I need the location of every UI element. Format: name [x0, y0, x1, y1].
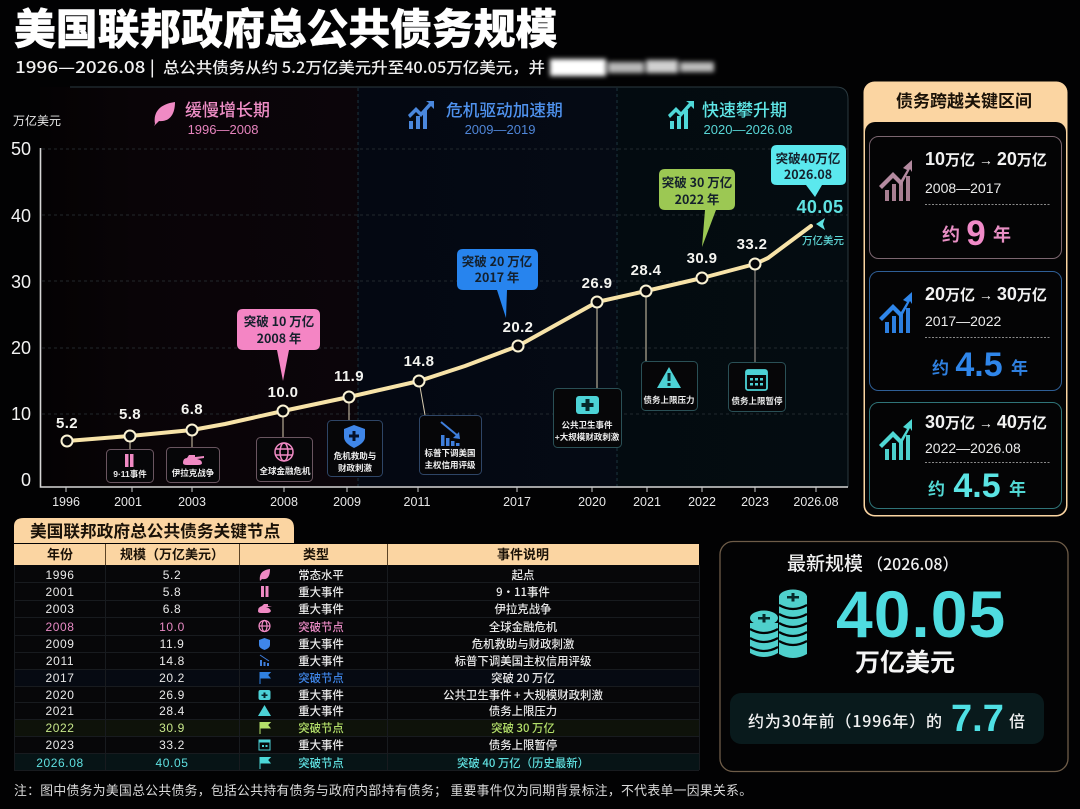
column: size: 6.8 — [163, 602, 181, 616]
card: 30 to 40: 年 — [1009, 475, 1026, 500]
card: 20 to 30 — [870, 272, 1062, 390]
latest value label: 40.05 — [796, 197, 844, 217]
table header: 年份 — [47, 544, 73, 563]
event box: debt ceiling suspension: 债务上限暂停 — [731, 396, 783, 406]
card: 10 to 20: 2008—2017 — [925, 180, 1002, 196]
event box: 9/11: 9·11事件 — [113, 469, 147, 479]
column: description: 公共卫生事件 + 大规模财政刺激 — [443, 687, 603, 703]
multiple bar — [730, 693, 1044, 744]
column: year — [36, 568, 84, 770]
multiple bar: 7.7 — [951, 698, 1004, 740]
latest value label: 万亿美元 — [802, 233, 844, 248]
column: type: 重大事件 — [298, 653, 344, 669]
data value labels: 5.8 — [119, 406, 141, 423]
column: description: 突破 40 万亿（历史最新） — [457, 755, 589, 771]
column: year: 2026.08 — [36, 756, 84, 770]
card: 20 to 30: 约 — [932, 354, 949, 379]
subtitle: 1996—2026.08 | — [15, 54, 155, 78]
callout: 30 trillion — [659, 169, 735, 247]
column: size: 5.8 — [163, 585, 181, 599]
card: 20 to 30: 20万亿 → 30万亿 — [925, 284, 1047, 305]
column: year: 2001 — [45, 585, 75, 599]
data value labels: 14.8 — [404, 353, 434, 370]
card: 20 to 30: 2017—2022 — [925, 313, 1002, 329]
subtitle — [15, 54, 714, 78]
card: 10 to 20 — [870, 136, 1062, 258]
column: size — [155, 568, 189, 770]
table header — [14, 544, 699, 565]
data value labels: 5.2 — [56, 415, 78, 432]
column: description: 9·11事件 — [496, 584, 550, 600]
column: year: 2023 — [45, 738, 75, 752]
event box: Iraq war: 伊拉克战争 — [172, 468, 215, 478]
column: description: 突破 30 万亿 — [491, 720, 555, 736]
y axis labels — [11, 112, 61, 490]
column: size: 10.0 — [159, 620, 185, 634]
column: type: 重大事件 — [298, 737, 344, 753]
card: 30 to 40 — [870, 402, 1062, 508]
period: crisis driven: 危机驱动加速期 — [446, 97, 563, 121]
event box: public health — [554, 388, 622, 448]
data value labels: 6.8 — [181, 401, 203, 418]
column: type — [298, 567, 344, 771]
card: 30 to 40: 2022—2026.08 — [925, 440, 1021, 456]
latest value label — [796, 197, 844, 248]
column: description: 伊拉克战争 — [495, 601, 551, 617]
event box: 9/11 — [106, 450, 154, 482]
row backgrounds — [14, 565, 700, 770]
column: type: 重大事件 — [298, 703, 344, 719]
column: year: 2003 — [45, 602, 75, 616]
column: type: 重大事件 — [298, 636, 344, 652]
x axis labels: 2001 — [114, 495, 142, 509]
period: rapid rise: 2020—2026.08 — [704, 122, 792, 137]
data value labels: 10.0 — [268, 384, 298, 401]
event box: public health: +大规模财政刺激 — [555, 432, 620, 442]
card: 10 to 20: 9 — [966, 214, 986, 253]
data value labels: 28.4 — [631, 262, 662, 279]
event box: global financial crisis: 全球金融危机 — [259, 466, 311, 476]
column: type: 重大事件 — [298, 601, 344, 617]
y axis labels: 20 — [11, 338, 31, 358]
y axis labels: 万亿美元 — [13, 112, 61, 129]
x axis labels: 2022 — [688, 495, 716, 509]
data value labels — [56, 236, 767, 432]
column: description: 危机救助与财政刺激 — [472, 636, 575, 652]
subtitle: 总公共债务从约 5.2万亿美元升至40.05万亿美元，并 — [163, 56, 545, 78]
callout: 10 trillion — [237, 309, 320, 381]
x axis labels: 2009 — [333, 495, 361, 509]
event box: rescue and stimulus: 危机救助与 — [334, 451, 376, 461]
connector lines — [130, 264, 755, 449]
table header: 规模（万亿美元） — [120, 544, 224, 563]
column: size: 14.8 — [159, 654, 185, 668]
period: slow growth: 1996—2008 — [188, 122, 258, 137]
event box: global financial crisis — [256, 438, 312, 482]
column: type: 突破节点 — [298, 619, 344, 635]
column: size: 40.05 — [155, 756, 189, 770]
period: slow growth — [154, 96, 270, 137]
card: 30 to 40: 30万亿 → 40万亿 — [925, 412, 1047, 433]
multiple bar: 约为30年前（1996年）的 — [748, 708, 942, 732]
table header: 类型 — [303, 544, 329, 563]
column: size: 28.4 — [159, 704, 185, 718]
data value labels: 30.9 — [687, 250, 717, 267]
data value labels: 33.2 — [737, 236, 767, 253]
data value labels: 20.2 — [503, 319, 533, 336]
column: description: 全球金融危机 — [489, 619, 558, 635]
column: description — [443, 567, 603, 771]
callout: 20 trillion — [457, 249, 538, 318]
card: 20 to 30: 年 — [1011, 354, 1028, 379]
event box: public health: 公共卫生事件 — [561, 420, 613, 430]
y axis labels: 30 — [11, 272, 31, 292]
event box: S&P downgrade: 标普下调美国 — [424, 448, 476, 458]
column: year: 2017 — [45, 671, 75, 685]
column: description: 债务上限暂停 — [489, 737, 557, 753]
column: type: 重大事件 — [298, 584, 344, 600]
blurred part of subtitle — [550, 59, 714, 76]
y axis labels: 50 — [11, 139, 31, 159]
table: key nodes — [14, 544, 700, 771]
panel: main line chart — [11, 87, 848, 509]
period: crisis driven — [408, 97, 563, 137]
y axis labels: 10 — [11, 404, 31, 424]
x axis labels: 2003 — [178, 495, 206, 509]
callout: 20 trillion: 2017 年 — [475, 267, 519, 286]
card: 10 to 20: 年 — [993, 221, 1011, 247]
event box: rescue and stimulus: 财政刺激 — [338, 463, 372, 473]
column: year: 2022 — [45, 721, 75, 735]
column: size: 5.2 — [163, 568, 181, 582]
x axis labels: 2017 — [503, 495, 531, 509]
x axis labels: 2026.08 — [793, 495, 839, 509]
data points — [62, 258, 760, 446]
table header: 事件说明 — [497, 544, 549, 563]
period: rapid rise: 快速攀升期 — [702, 96, 787, 121]
column: size: 33.2 — [159, 738, 185, 752]
callout: 10 trillion: 2008 年 — [257, 328, 301, 347]
column: size: 11.9 — [160, 637, 184, 651]
table heading tab: 美国联邦政府总公共债务关键节点 — [30, 518, 281, 542]
x axis labels: 2021 — [633, 495, 661, 509]
callout: 40 trillion: 突破40万亿 — [776, 148, 840, 167]
column: type: 常态水平 — [298, 567, 344, 583]
x axis labels: 2023 — [741, 495, 769, 509]
event box: rescue and stimulus — [328, 420, 382, 476]
column: size: 30.9 — [159, 721, 185, 735]
event box: debt ceiling suspension — [728, 362, 786, 412]
column: year: 2011 — [46, 654, 74, 668]
data value labels: 11.9 — [334, 368, 364, 385]
x axis labels: 1996 — [52, 495, 80, 509]
column: year: 2021 — [45, 704, 75, 718]
column: year: 2008 — [45, 620, 75, 634]
debt line — [67, 226, 811, 441]
x axis labels: 2020 — [578, 495, 606, 509]
callout: 10 trillion: 突破 10 万亿 — [244, 311, 314, 330]
period: slow growth: 缓慢增长期 — [185, 96, 270, 121]
footnote: 注：图中债务为美国总公共债务，包括公共持有债务与政府内部持有债务； 重要事件仅为同期背景标注，不代表单一因果关系。 — [14, 780, 752, 799]
event box: debt ceiling pressure: 债务上限压力 — [643, 395, 695, 405]
latest heading: 最新规模（2026.08） — [787, 549, 959, 576]
event box: debt ceiling pressure — [642, 362, 698, 410]
icon: coins — [750, 590, 807, 658]
column: year: 2020 — [45, 688, 75, 702]
column: size: 26.9 — [159, 688, 185, 702]
y axis labels: 40 — [11, 206, 31, 226]
panel: key ranges — [864, 82, 1068, 516]
x axis labels: 2011 — [404, 495, 430, 509]
column: year: 2009 — [45, 637, 75, 651]
column: type: 重大事件 — [298, 687, 344, 703]
column: size: 20.2 — [159, 671, 185, 685]
axis lines — [40, 148, 848, 487]
period: crisis driven: 2009—2019 — [465, 122, 535, 137]
data value labels: 26.9 — [582, 275, 612, 292]
column: type: 突破节点 — [298, 670, 344, 686]
card: 10 to 20: 10万亿 → 20万亿 — [925, 149, 1047, 170]
event box: S&P downgrade — [420, 416, 482, 474]
panel: latest size — [720, 542, 1068, 772]
callout: 30 trillion: 2022 年 — [675, 189, 719, 208]
multiple bar: 倍 — [1009, 708, 1025, 732]
x axis labels: 2008 — [270, 495, 298, 509]
column: type: 突破节点 — [298, 755, 344, 771]
event box: Iraq war — [166, 448, 220, 482]
column: year: 1996 — [45, 568, 75, 582]
column: description: 标普下调美国主权信用评级 — [455, 653, 592, 669]
big number: 40.05 — [836, 577, 1006, 651]
column: description: 突破 20 万亿 — [491, 670, 555, 686]
callout: 40 trillion — [771, 145, 846, 197]
period: rapid rise — [668, 96, 792, 137]
event box: S&P downgrade: 主权信用评级 — [424, 460, 476, 470]
card: 10 to 20: 约 — [942, 221, 960, 247]
column: type icons — [258, 569, 272, 769]
panel heading: 债务跨越关键区间 — [896, 87, 1032, 112]
callout: 20 trillion: 突破 20 万亿 — [462, 251, 532, 270]
callout: 30 trillion: 突破 30 万亿 — [662, 172, 732, 191]
column: description: 债务上限压力 — [489, 703, 557, 719]
unit: 万亿美元 — [855, 643, 955, 679]
y axis labels: 0 — [21, 470, 31, 490]
card: 30 to 40: 4.5 — [953, 467, 1001, 505]
card: 30 to 40: 约 — [928, 475, 945, 500]
callout: 40 trillion: 2026.08 — [784, 164, 832, 183]
x axis labels — [52, 487, 839, 509]
card: 20 to 30: 4.5 — [955, 346, 1003, 384]
column: type: 突破节点 — [298, 720, 344, 736]
column: description: 起点 — [512, 567, 534, 583]
